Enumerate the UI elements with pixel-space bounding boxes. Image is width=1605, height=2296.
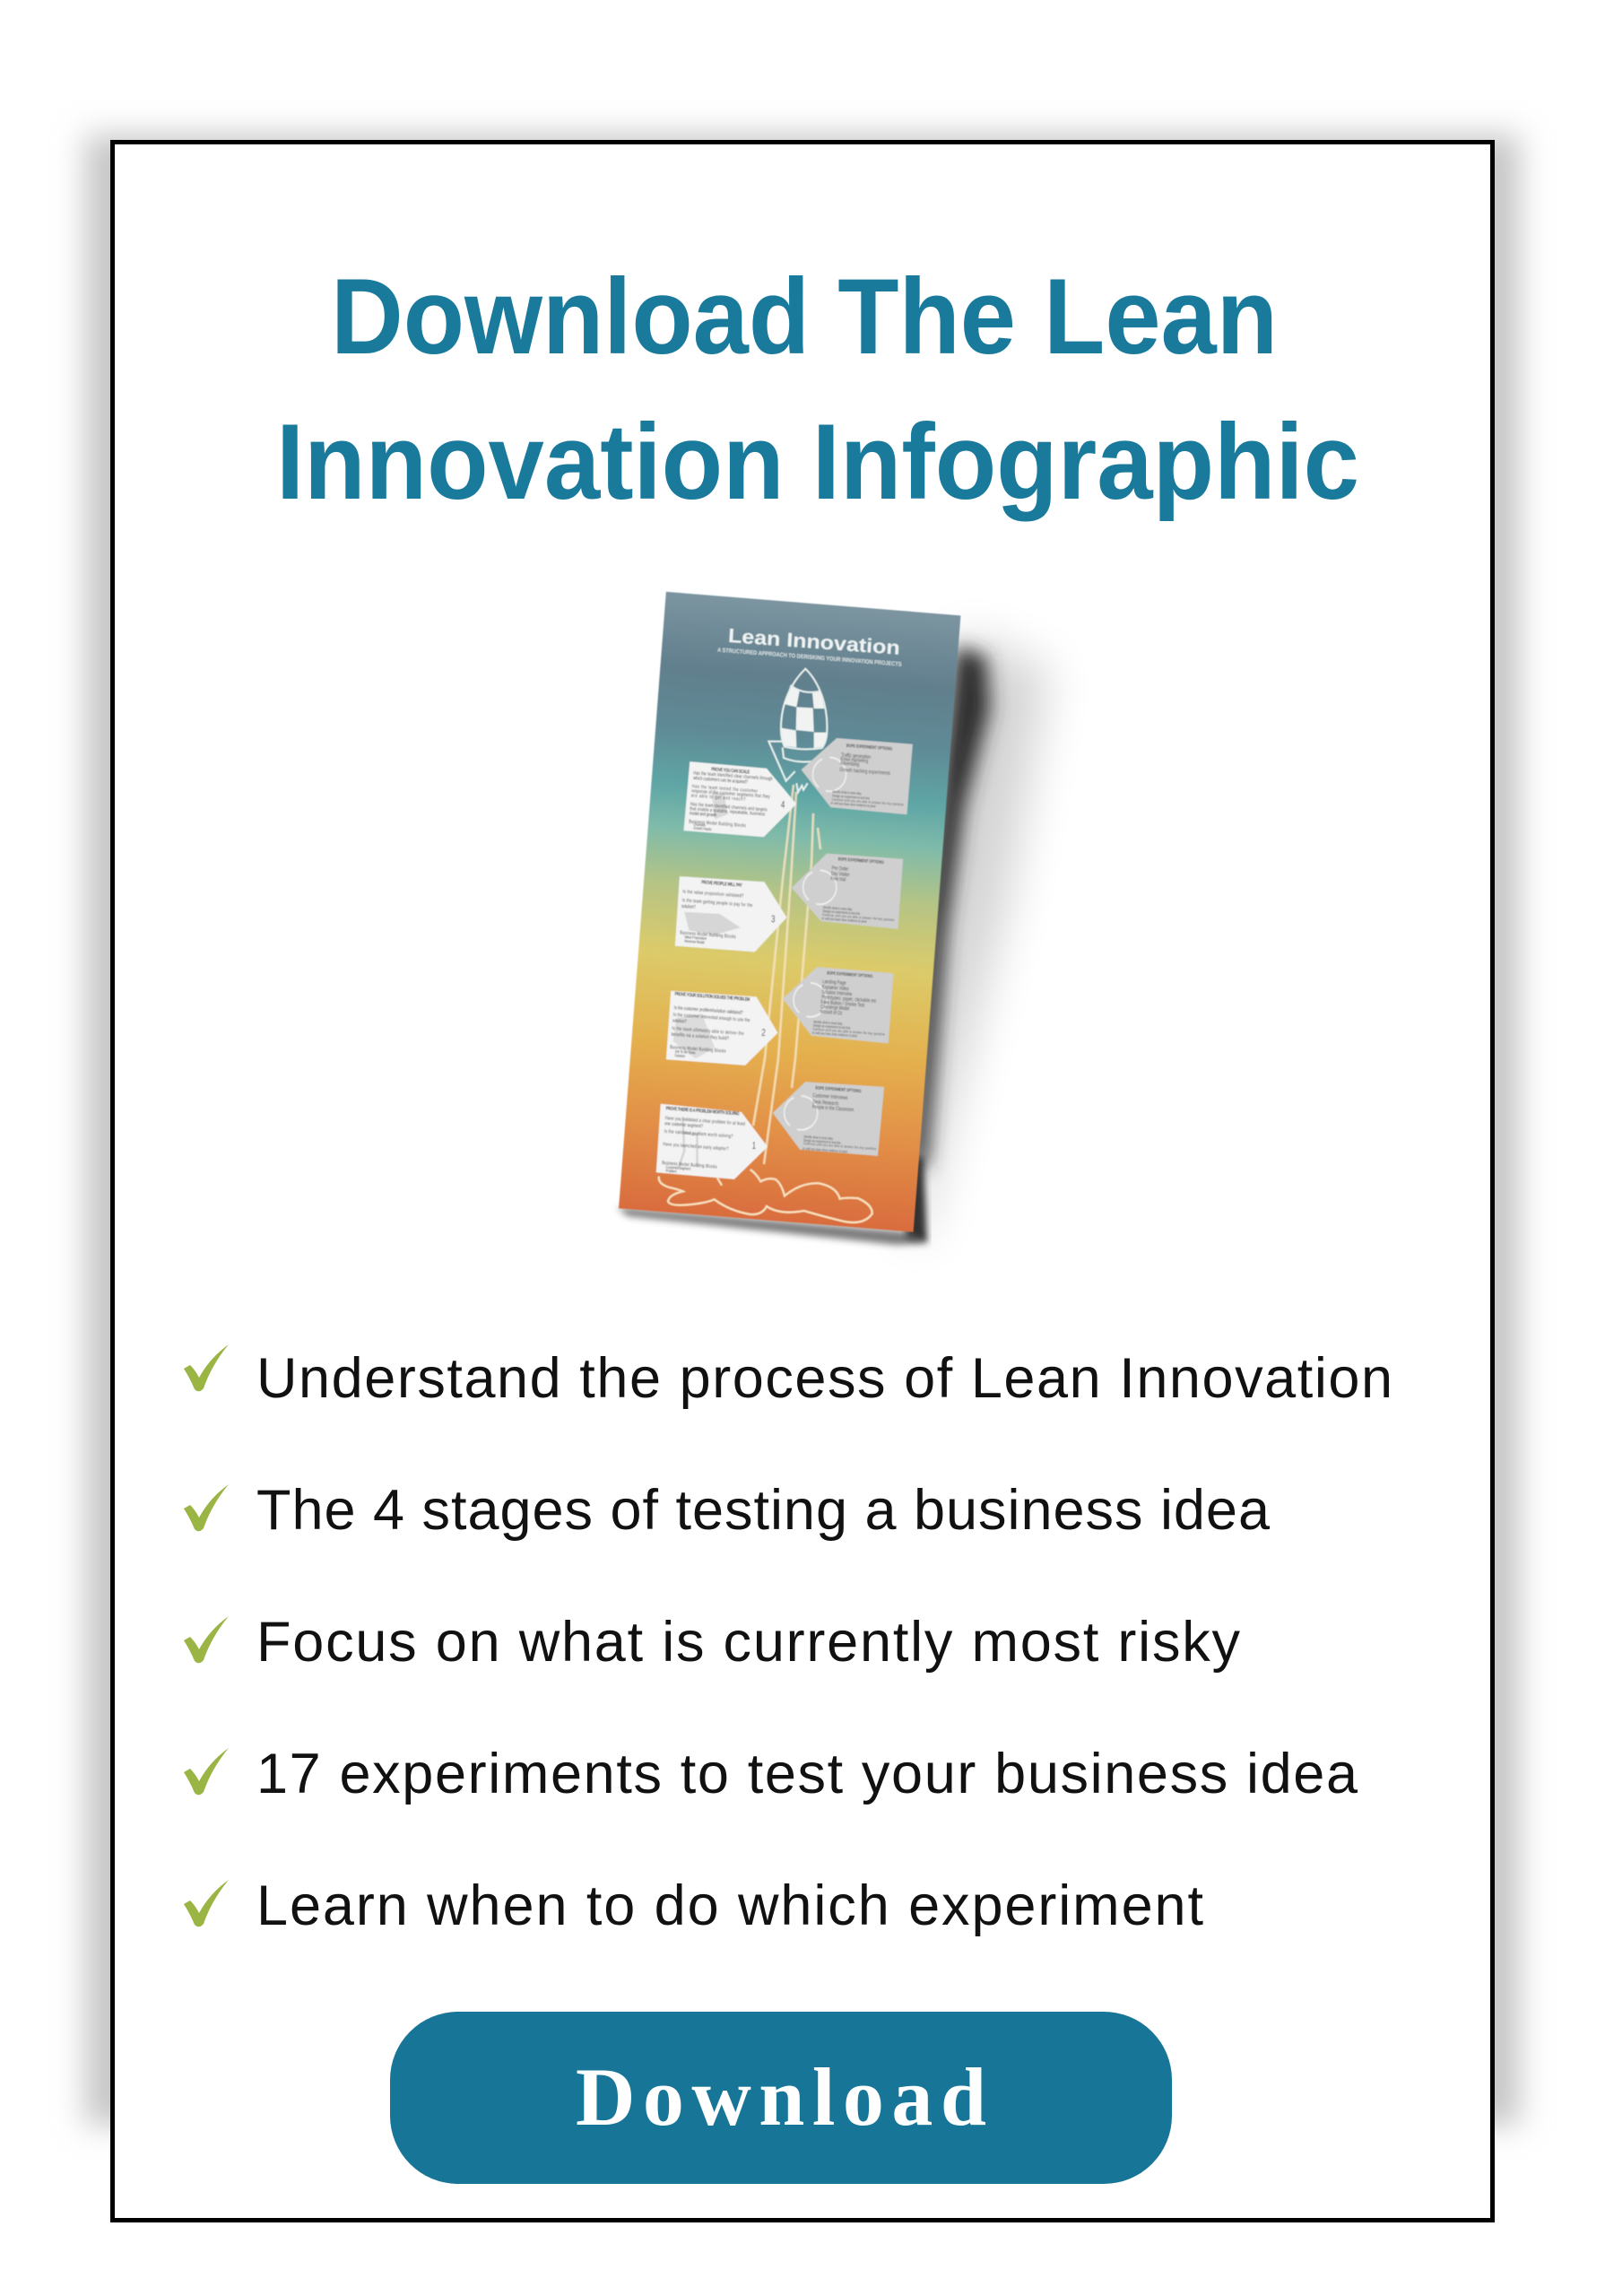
- experiment options panel 1: Design an experiment to test this: [803, 1138, 841, 1145]
- stage 2 panel: prove your solution solves the problem: Solution: [674, 1053, 685, 1058]
- stage 4 panel: prove you can scale: Has the team tested the customer: [692, 784, 758, 795]
- stage 3 panel: prove people will pay: Is the team getting people to pay for the: [682, 898, 753, 909]
- exhaust trails: [753, 785, 820, 1164]
- experiment options panel 4: BOPE EXPERIMENT OPTIONS:: [846, 743, 893, 752]
- stage 2 panel: prove your solution solves the problem: Is the customer problem/solution validated?: [674, 1004, 743, 1016]
- experiment options panel 3: BOPE EXPERIMENT OPTIONS:: [838, 857, 885, 865]
- experiment options panel 2: Solution Interview: [821, 989, 852, 998]
- stage 4 panel: prove you can scale: [683, 761, 796, 837]
- stage 3 panel: prove people will pay: PROVE PEOPLE WILL PAY: [701, 880, 743, 889]
- experiment options panel 2: Wizard of Oz: [820, 1009, 843, 1017]
- benefit 3: Focus on what is currently most risky: [256, 1611, 1241, 1674]
- experiment options panel 1: BOPE EXPERIMENT OPTIONS:: [815, 1085, 863, 1093]
- experiment options panel 4: Identify what is most risky: [832, 789, 862, 796]
- poster: Lean Innovation infographic thumbnail: [619, 592, 960, 1232]
- icon: check mark: [184, 1748, 229, 1795]
- stage 2 panel: prove your solution solves the problem: Job To Be Done: [674, 1048, 696, 1055]
- stage 1 panel: prove there is a problem worth solving: PROVE THERE IS A PROBLEM WORTH SOLVING: [665, 1106, 740, 1118]
- stage 1 panel: prove there is a problem worth solving: 1: [751, 1140, 756, 1152]
- stage 3 panel: prove people will pay: Revenue Model: [684, 938, 705, 944]
- stage 4 panel: prove you can scale: Growth Hacks: [693, 825, 712, 831]
- stage 3 panel: prove people will pay: Is the value proposition validated?: [682, 889, 744, 900]
- experiment options panel 2: Concierge Model: [820, 1004, 849, 1013]
- experiment options panel 4: Advertising: [840, 761, 859, 769]
- icon: check mark: [184, 1616, 229, 1663]
- stage 2 panel: prove your solution solves the problem: Is the customer interested enough to use the: [673, 1012, 750, 1023]
- smoke cloud outline: [659, 1170, 872, 1222]
- experiment options panel 2: Continue until you are able to answer the key question: [812, 1027, 885, 1037]
- experiment options panel 2: Design an experiment to test this: [813, 1023, 851, 1031]
- experiment options panel 3: Design an experiment to test this: [822, 909, 860, 916]
- stage 1 panel: prove there is a problem worth solving: Business Model Building Blocks: [662, 1160, 717, 1170]
- stage 1 panel: prove there is a problem worth solving: Problem: [665, 1168, 677, 1174]
- icon: check mark: [184, 1344, 229, 1391]
- experiment options panel 4: Traffic generation: [841, 752, 871, 761]
- experiment options panel 3: Pre Order: [831, 865, 849, 873]
- title: Innovation Infographic: [276, 402, 1359, 522]
- stage 4 panel: prove you can scale: are able to get and reach?: [691, 793, 746, 803]
- experiment options panel 2: Identify what is most risky: [813, 1020, 843, 1026]
- experiment options panel 3: or until you have clear evidence to pivot: [821, 917, 867, 924]
- stage 4 panel: prove you can scale: Has the team identified clear channels through: [693, 770, 773, 782]
- experiment options panel 3: [792, 854, 903, 929]
- benefit 4: 17 experiments to test your business idea: [256, 1743, 1358, 1805]
- poster heading: Lean Innovation: [727, 625, 900, 660]
- icon: check mark: [184, 1880, 229, 1926]
- experiment options panel 2: [783, 967, 893, 1043]
- experiment options panel 3: Continue until you are able to answer the key question: [822, 913, 895, 922]
- poster heading: A STRUCTURED APPROACH TO DERISKING YOUR INNOVATION PROJECTS: [717, 648, 902, 668]
- download button: Download: [576, 2051, 986, 2143]
- stage 2 panel: prove your solution solves the problem: PROVE YOUR SOLUTION SOLVES THE PROBLEM: [674, 991, 750, 1003]
- rocket: [768, 669, 827, 792]
- stage 4 panel: prove you can scale: which customers can be acquired?: [693, 775, 748, 786]
- experiment options panel 2: Prototypes: paper, clickable etc: [821, 995, 877, 1004]
- experiment options panel 3: Day Visitor: [831, 871, 850, 878]
- stage 4 panel: prove you can scale: Channels: [693, 822, 706, 828]
- stage 3 panel: prove people will pay: Value Proposition: [684, 934, 707, 941]
- stage 4 panel: prove you can scale: Has the team identified channels and targets: [690, 801, 768, 813]
- experiment options panel 1: or until you have clear evidence to pivot: [802, 1146, 847, 1154]
- card frame: [113, 142, 1492, 2221]
- experiment options panel 1: Identify what is most risky: [803, 1135, 833, 1141]
- title: Download The Lean: [331, 257, 1278, 377]
- experiment options panel 4: Growth hacking experiments: [839, 767, 890, 777]
- stage 1 panel: prove there is a problem worth solving: Is the validated problem worth solving?: [664, 1128, 733, 1140]
- stage 2 panel: prove your solution solves the problem: 2: [761, 1027, 766, 1039]
- experiment options panel 2: Landing Page: [822, 978, 846, 987]
- stage 4 panel: prove you can scale: model and growth: [690, 811, 717, 819]
- benefit 2: The 4 stages of testing a business idea: [256, 1479, 1271, 1542]
- experiment options panel 1: [773, 1082, 884, 1156]
- experiment options panel 1: Desk Research: [812, 1100, 838, 1108]
- experiment options panel 3: Free trial: [830, 876, 846, 883]
- experiment options panel 1: People in the Classroom: [812, 1104, 855, 1114]
- experiment options panel 1: Continue until you are able to answer the key question: [803, 1142, 877, 1151]
- stage 4 panel: prove you can scale: response of the customer segments that they: [691, 788, 770, 800]
- stage 2 panel: prove your solution solves the problem: benefits via a solution they build?: [671, 1031, 729, 1042]
- stage 1 panel: prove there is a problem worth solving: Have you validated a clear problem for at least: [665, 1115, 746, 1127]
- experiment options panel 4: [802, 738, 913, 814]
- stage 3 panel: prove people will pay: 3: [771, 914, 776, 926]
- stage 4 panel: prove you can scale: 4: [781, 799, 785, 811]
- icon: check mark: [184, 1484, 229, 1531]
- experiment options panel 3: Identify what is most risky: [823, 905, 853, 911]
- experiment options panel 4: Design an experiment to test this: [832, 794, 870, 801]
- stage 4 panel: prove you can scale: PROVE YOU CAN SCALE: [711, 767, 750, 776]
- stage 1 panel: prove there is a problem worth solving: one customer segment?: [664, 1121, 703, 1130]
- experiment options panel 2: BOPE EXPERIMENT OPTIONS:: [827, 970, 873, 978]
- poster drop shadow: [617, 632, 1049, 1245]
- experiment options panel 2: or until you have clear evidence to pivot: [812, 1031, 857, 1039]
- poster heading: [717, 625, 902, 668]
- experiment options panel 2: Fake Button / Smoke Test: [820, 999, 865, 1009]
- experiment options panel 1: Customer Interviews: [812, 1092, 848, 1101]
- benefit 1: Understand the process of Lean Innovation: [256, 1347, 1392, 1410]
- benefit 5: Learn when to do which experiment: [256, 1874, 1203, 1937]
- stage 2 panel: prove your solution solves the problem: Is the team ultimately able to deliver the: [672, 1025, 744, 1037]
- stage 3 panel: prove people will pay: Business Model Building Blocks: [680, 930, 736, 940]
- stage 2 panel: prove your solution solves the problem: [666, 991, 777, 1065]
- poster background gradient: [619, 592, 960, 1232]
- experiment options panel 4: Continue until you are able to answer the key question: [831, 797, 904, 807]
- stage 3 panel: prove people will pay: [675, 876, 786, 952]
- stage 1 panel: prove there is a problem worth solving: Customer Segment: [665, 1164, 691, 1171]
- stage 4 panel: prove you can scale: Business Model Building Blocks: [689, 819, 746, 830]
- stage 1 panel: prove there is a problem worth solving: [656, 1104, 768, 1179]
- card drop shadow: [85, 135, 1520, 2126]
- experiment options panel 4: or until you have clear evidence to pivot: [830, 801, 876, 808]
- experiment options panel 2: Explainer Video: [822, 985, 849, 993]
- stage 3 panel: prove people will pay: solution?: [681, 903, 696, 910]
- stage 4 panel: prove you can scale: that enable a scalable, repeatable, business: [690, 806, 766, 818]
- stage 1 panel: prove there is a problem worth solving: Have you launched an early adopter?: [663, 1142, 729, 1152]
- download button: [390, 2012, 1172, 2184]
- experiment options panel 4: Email marketing: [840, 756, 868, 765]
- stage 2 panel: prove your solution solves the problem: solution?: [672, 1018, 687, 1025]
- stage 2 panel: prove your solution solves the problem: Business Model Building Blocks: [670, 1044, 726, 1055]
- title: [276, 257, 1359, 522]
